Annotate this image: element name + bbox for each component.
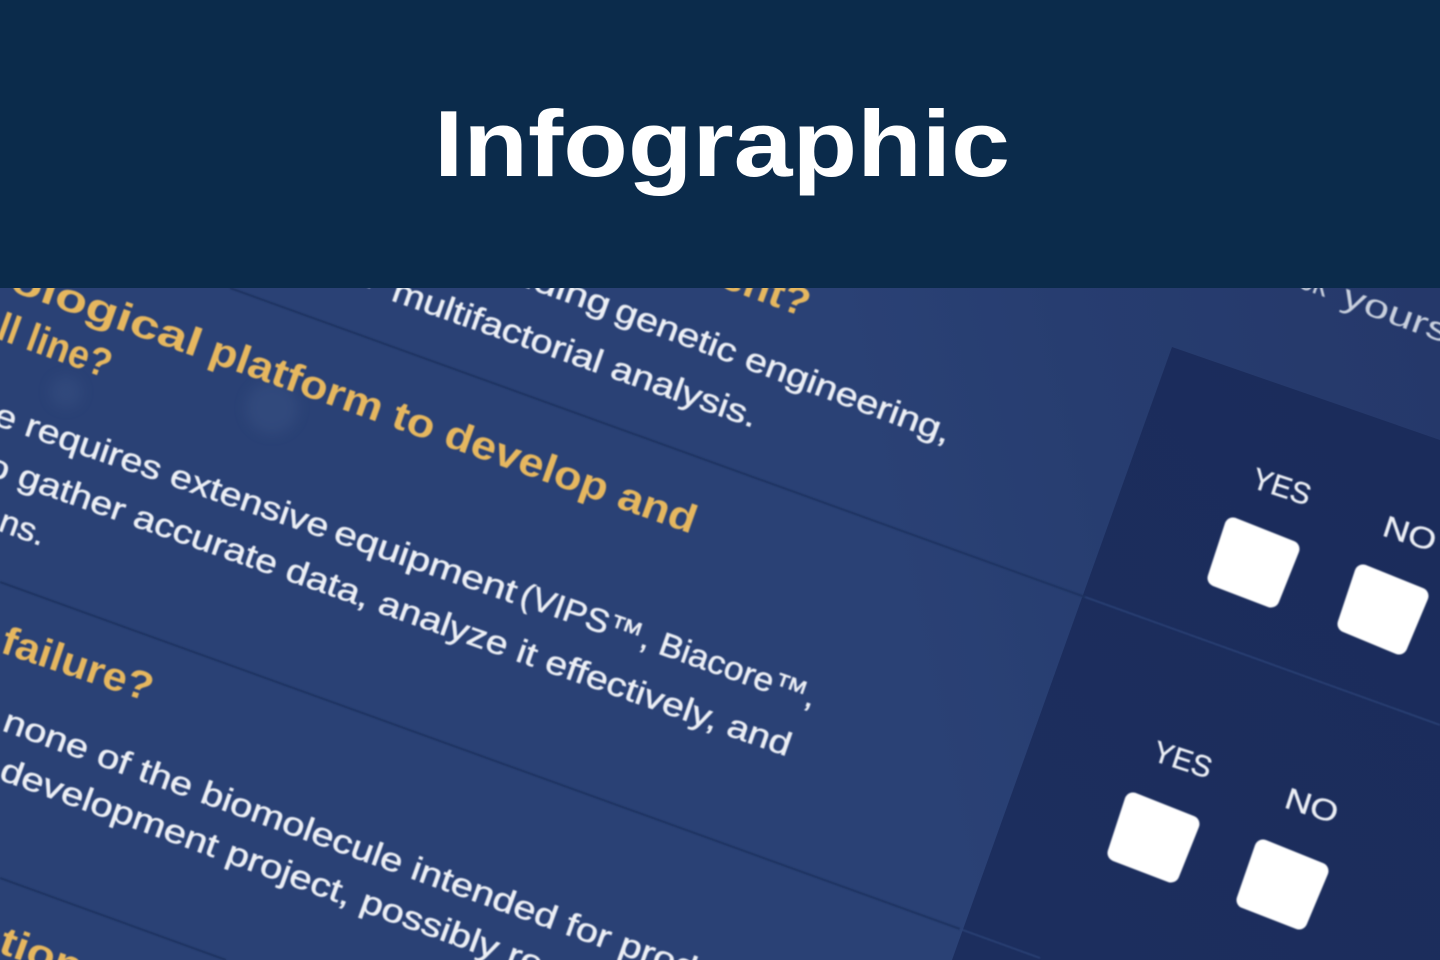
panel: dark yes/no answer column xyxy=(952,347,1440,960)
column heading fragment: Check xyxy=(1243,240,1336,304)
question 1 body text: and xyxy=(318,242,382,295)
panel: tilted checklist background xyxy=(0,288,1440,960)
label: no: NO xyxy=(1379,510,1440,558)
question 2 body text xyxy=(0,396,822,763)
title: Infographic xyxy=(434,91,1010,196)
question 2 body text: (VIPS™, Biacore™, xyxy=(516,576,822,715)
header band xyxy=(0,0,1440,288)
question 2 body text: o gather accurate data, analyze it effectively, and xyxy=(0,446,797,763)
checkbox: yes xyxy=(1116,801,1191,874)
question 2 body text: equipment xyxy=(330,513,522,610)
checkbox: yes xyxy=(1216,526,1291,599)
question 1 heading fragment: ent? xyxy=(715,253,816,326)
checkbox: no xyxy=(1346,573,1420,646)
question 3 body text: development project, possibly re xyxy=(0,751,549,960)
question 1 body text: multifactorial analysis. xyxy=(388,272,763,434)
question 2 heading: ological xyxy=(5,257,208,366)
question 3 body text: none of the biomolecule intended for prod xyxy=(0,702,702,960)
label: yes: YES xyxy=(1248,462,1315,512)
answer row 2 xyxy=(1116,735,1342,921)
label: yes: YES xyxy=(1149,735,1216,785)
question 2 heading: platform to develop and xyxy=(204,328,703,542)
checklist text xyxy=(0,232,1440,960)
question 1 body text: genetic engineering, xyxy=(611,291,957,450)
question 1 body text xyxy=(318,232,957,450)
label: no: NO xyxy=(1281,782,1342,830)
question 3 heading: failure? xyxy=(0,619,159,710)
column heading fragment xyxy=(1243,240,1440,367)
answer row 1 xyxy=(1216,462,1440,646)
checkbox: no xyxy=(1245,848,1320,921)
question 2 heading xyxy=(0,257,703,542)
question 1 body text: including xyxy=(449,232,616,323)
